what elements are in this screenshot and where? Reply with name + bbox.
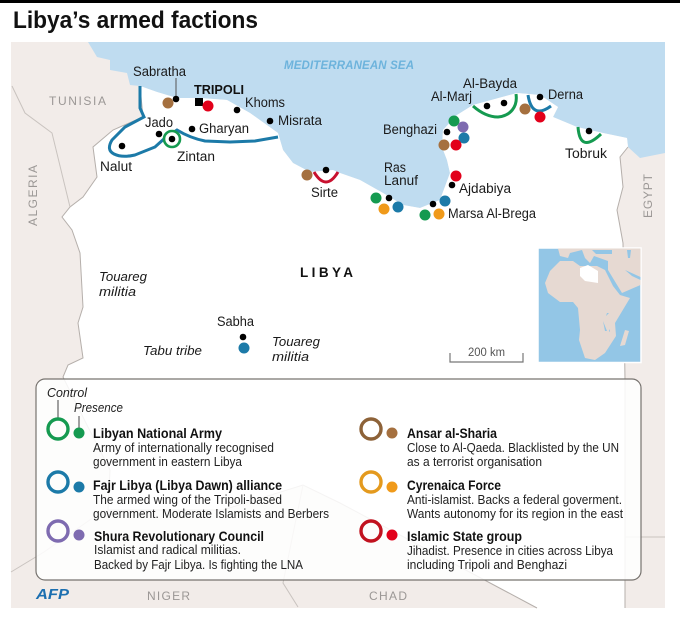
legend item: Ansar al-Sharia — [361, 419, 619, 469]
key: control and presence: Control — [47, 386, 88, 400]
militia label: Touareg south: Touareg — [272, 334, 321, 349]
militia label: Touareg west — [99, 269, 148, 299]
Ajdabiya: Ajdabiya — [459, 181, 511, 196]
western city labels — [100, 64, 322, 174]
legend item: Libyan National Army: Libyan National Army — [93, 426, 222, 441]
Marsa Al-Brega — [420, 196, 536, 221]
western city labels: Gharyan — [199, 121, 249, 136]
Tobruk: Tobruk — [565, 146, 607, 161]
legend item: Shura Revolutionary Council: Backed by Fajr Libya. Is fighting the LNA — [94, 558, 304, 572]
legend item: Libyan National Army: government in eastern Libya — [93, 455, 242, 469]
Marsa Al-Brega: Marsa Al-Brega — [448, 206, 536, 221]
legend item: Fajr Libya — [48, 472, 329, 521]
Sabha — [217, 314, 254, 354]
Ras Lanuf: Ras — [384, 160, 406, 175]
Ras Lanuf: Lanuf — [384, 173, 418, 188]
legend item: Shura Revolutionary Council — [48, 521, 304, 572]
Tripoli capital marker — [195, 98, 203, 106]
panel: legend — [36, 379, 641, 580]
western cities — [100, 64, 322, 174]
legend item: Islamic State group: Islamic State group — [407, 529, 522, 544]
militia label: Touareg south: militia — [272, 349, 309, 364]
Benghazi: Benghazi — [383, 122, 437, 137]
Derna — [520, 87, 583, 122]
Benghazi — [383, 116, 470, 150]
Ajdabiya — [449, 170, 511, 196]
country label: Algeria: ALGERIA — [26, 165, 40, 226]
Libya territory — [62, 86, 628, 608]
legend item: Ansar al-Sharia: Close to Al-Qaeda. Blacklisted by the UN — [407, 441, 619, 455]
Sabha: Sabha — [217, 314, 254, 329]
legend item: Cyrenaica Force — [361, 472, 624, 521]
key: control and presence: Presence — [74, 401, 123, 415]
Derna: Derna — [548, 87, 583, 102]
Zintan control ring — [164, 131, 180, 147]
top bar — [0, 0, 680, 3]
Tobruk — [565, 127, 607, 161]
country label: Tunisia: TUNISIA — [49, 94, 106, 108]
inset map: Africa — [538, 248, 641, 362]
sea label: MEDITERRANEAN SEA — [284, 60, 414, 72]
militia label: Touareg west: Touareg — [99, 269, 148, 284]
legend item: Islamic State group: Jihadist. Presence in cities across Libya — [407, 544, 613, 558]
western city labels: Jado — [145, 115, 173, 130]
Sabratha leader line — [175, 78, 177, 96]
Libya land borders — [62, 86, 628, 608]
legend item: Shura Revolutionary Council: Shura Revolutionary Council — [94, 529, 264, 544]
Tripoli presence — [202, 100, 214, 112]
legend item: Fajr Libya: Fajr Libya (Libya Dawn) alliance — [93, 478, 282, 493]
Ras Lanuf — [370, 160, 418, 214]
western city labels: Zintan — [177, 149, 215, 164]
city dots — [119, 96, 273, 149]
legend item: Shura Revolutionary Council: Islamist and radical militias. — [94, 543, 241, 557]
western city labels: Misrata — [278, 113, 322, 128]
Sirte: Sirte — [311, 185, 338, 200]
country label: Niger: NIGER — [147, 589, 190, 603]
scale bar — [450, 347, 523, 362]
legend item: Ansar al-Sharia: as a terrorist organisation — [407, 455, 542, 469]
front line: Fajr Libya control — [109, 86, 278, 156]
Al-Marj and Al-Bayda: Al-Bayda — [463, 76, 517, 91]
legend item: Libyan National Army — [48, 419, 274, 469]
sea — [88, 42, 665, 208]
Sabratha presence — [162, 98, 174, 108]
western city labels: Nalut — [100, 159, 132, 174]
legend item: Fajr Libya: government. Moderate Islamists and Berbers — [93, 507, 329, 521]
title: Libya’s armed factions — [13, 7, 258, 34]
militia label: Touareg south — [272, 334, 321, 364]
Al-Marj and Al-Bayda — [431, 76, 517, 117]
legend item: Islamic State group: including Tripoli and Benghazi — [407, 558, 567, 572]
AFP logo: AFP — [35, 587, 69, 603]
country label: Egypt: EGYPT — [641, 173, 655, 218]
country label: Libya: LIBYA — [300, 265, 353, 280]
legend item: Libyan National Army: Army of internationally recognised — [93, 441, 274, 455]
Sirte — [302, 167, 338, 200]
legend item: Fajr Libya: The armed wing of the Tripoli-based — [93, 493, 282, 507]
scale bar: 200 km — [468, 347, 505, 359]
militia label: Touareg west: militia — [99, 284, 136, 299]
western city labels: Khoms — [245, 95, 285, 110]
legend item: Cyrenaica Force: Cyrenaica Force — [407, 478, 501, 493]
legend item: Ansar al-Sharia: Ansar al-Sharia — [407, 426, 497, 441]
legend box — [36, 379, 641, 580]
country label: Chad: CHAD — [369, 589, 407, 603]
western city labels: Sabratha — [133, 64, 186, 79]
militia label: Tabu tribe: Tabu tribe — [143, 343, 202, 358]
legend item: Cyrenaica Force: Anti-islamist. Backs a federal goverment. — [407, 493, 622, 507]
legend item: Cyrenaica Force: Wants autonomy for its region in the east — [407, 507, 624, 521]
western city labels: TRIPOLI — [194, 83, 244, 97]
key: control and presence — [47, 386, 123, 428]
legend item: Islamic State group — [361, 521, 613, 572]
Al-Marj and Al-Bayda: Al-Marj — [431, 89, 472, 104]
